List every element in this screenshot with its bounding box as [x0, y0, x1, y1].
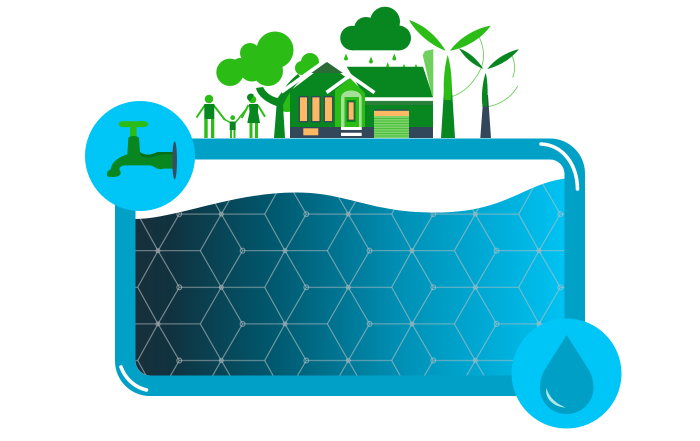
- frame highlight: bottom left: [121, 367, 146, 390]
- main roof: [347, 67, 433, 97]
- left wall: [290, 63, 365, 127]
- garage: [374, 110, 409, 138]
- child: [224, 108, 247, 138]
- roof outlines: [282, 60, 374, 93]
- base: [290, 127, 433, 138]
- chimney: [423, 49, 433, 96]
- tank frame: [115, 138, 585, 396]
- drop badge: [512, 318, 622, 428]
- porch: [335, 78, 365, 127]
- water with hexagon grid: [135, 178, 565, 376]
- drop highlight: [546, 388, 566, 408]
- frame highlight: top right: [541, 144, 578, 189]
- tree: [216, 32, 319, 138]
- family: [196, 94, 265, 138]
- woman: [242, 94, 265, 138]
- wind turbine: large: [409, 20, 491, 138]
- icon: water drop: [540, 335, 594, 414]
- rain drops: [344, 54, 418, 67]
- wind turbine: small: [459, 48, 519, 138]
- scene: family, tree, house, cloud, wind turbines: [196, 7, 519, 138]
- man: [196, 95, 225, 138]
- rain cloud: [340, 7, 418, 67]
- windows: [299, 97, 333, 122]
- house: [282, 49, 433, 138]
- tap badge: [85, 101, 195, 211]
- icon: water tap: [107, 121, 177, 179]
